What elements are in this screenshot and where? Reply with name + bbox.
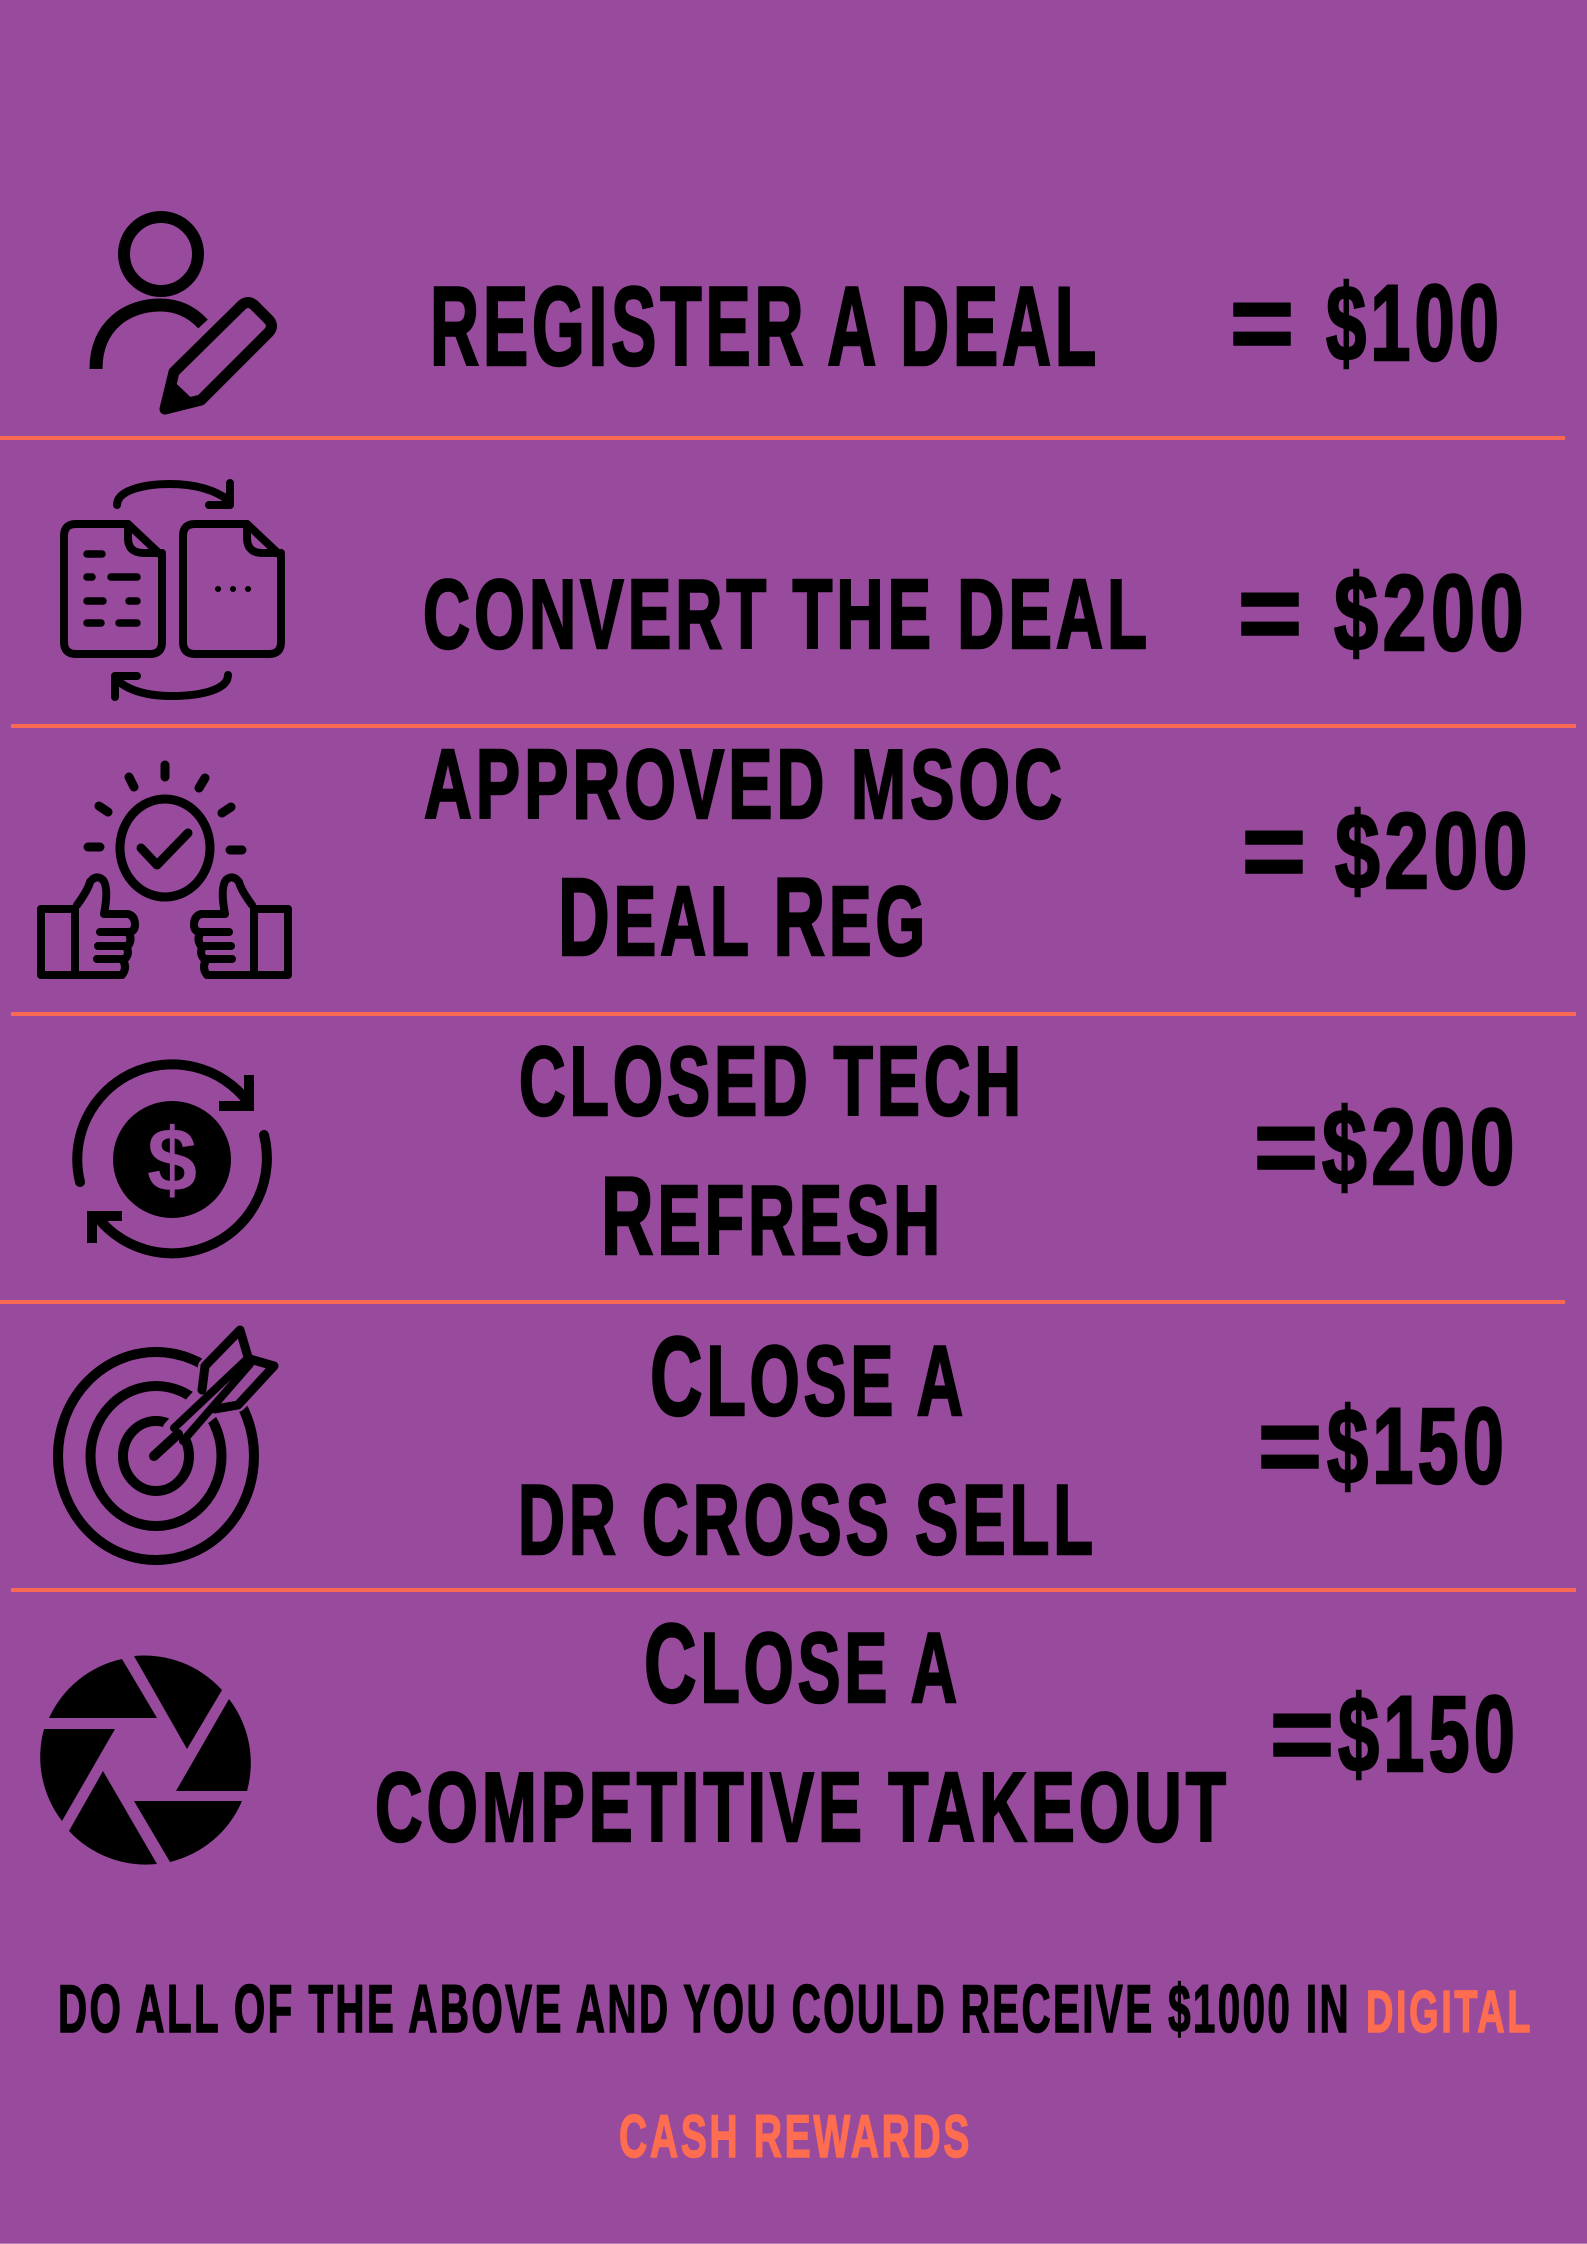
label: close a: CLOSE A [644, 1601, 961, 1726]
label: deal reg: DEAL REG [558, 856, 929, 979]
icon: dollar refresh [77, 1064, 267, 1253]
label: approved msoc: APPROVED MSOC [424, 729, 1066, 839]
row: close a dr cross sell [58, 1314, 1508, 1575]
value: $150: = [1270, 1673, 1334, 1794]
row: convert the deal [64, 483, 1528, 697]
footer callout [58, 1971, 1533, 2170]
highlighted text: cash rewards: CASH REWARDS [619, 2103, 972, 2170]
label: convert the deal: CONVERT THE DEAL [423, 559, 1151, 669]
value: $150: $150 [1327, 1385, 1508, 1506]
label: closed tech: CLOSED TECH [519, 1026, 1025, 1136]
value: $200 [1238, 552, 1528, 673]
value: $200: = [1238, 552, 1302, 673]
value: $200: $200 [1322, 1086, 1519, 1207]
row: register a deal [96, 217, 1503, 409]
icon: thumbs up with check [41, 765, 288, 975]
label: register a deal: REGISTER A DEAL [430, 264, 1100, 389]
value: $150 [1258, 1385, 1508, 1506]
value: $200: = [1242, 790, 1306, 911]
value: $200 [1242, 790, 1532, 911]
label: refresh: REFRESH [601, 1155, 944, 1278]
value: $200: = [1254, 1086, 1318, 1207]
icon: dollar refresh: $ [147, 1111, 197, 1211]
value: $100: $100 [1326, 262, 1503, 383]
icon: documents exchange [64, 483, 281, 697]
value: $200 [1254, 1086, 1519, 1207]
icon: camera aperture [40, 1656, 251, 1865]
value: $150 [1270, 1673, 1519, 1794]
row: approved msoc deal reg [41, 729, 1532, 979]
value: $150: = [1258, 1385, 1322, 1506]
icon: target with arrow [58, 1330, 277, 1560]
row: closed tech refresh [77, 1026, 1519, 1278]
icon: person with pencil [96, 217, 272, 409]
label: close a: CLOSE A [650, 1314, 967, 1439]
label: dr cross sell: DR CROSS SELL [518, 1464, 1097, 1575]
value: $100 [1230, 262, 1503, 383]
value: $100: = [1230, 262, 1294, 383]
row: close a competitive takeout [40, 1601, 1519, 1865]
